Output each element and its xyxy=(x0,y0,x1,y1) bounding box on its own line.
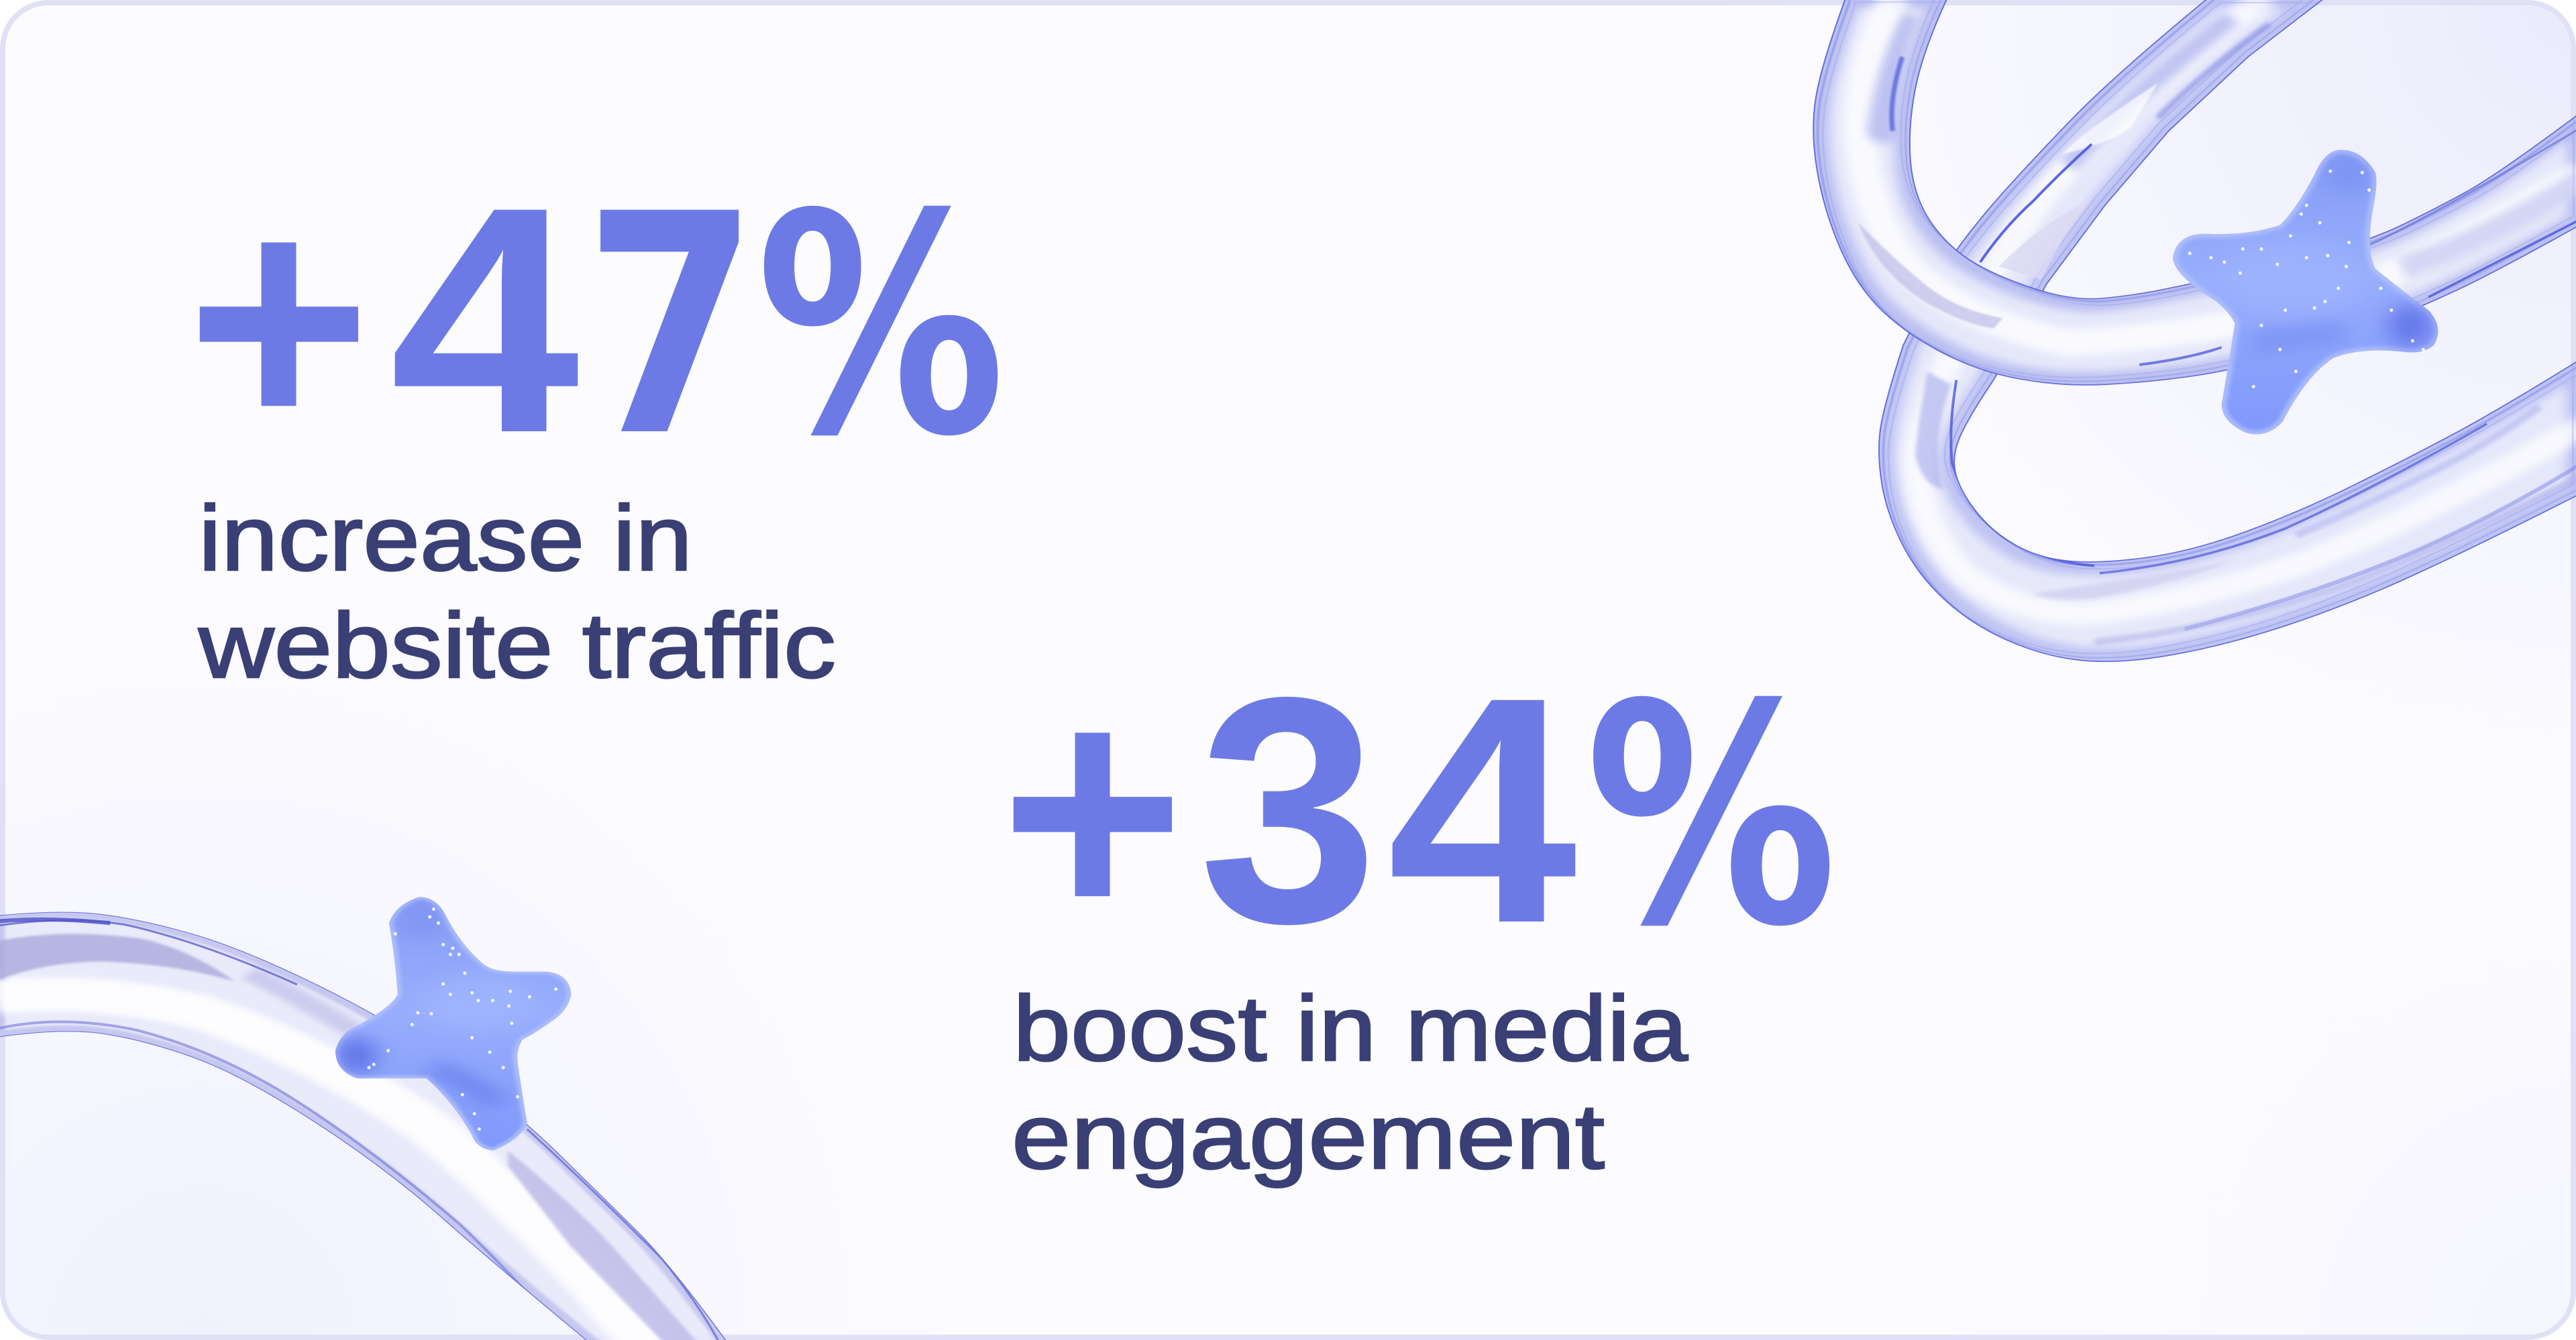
number: +47%: 7 xyxy=(584,150,759,503)
description: increase in website traffic: increase in xyxy=(199,487,692,590)
star speckles xyxy=(2190,171,2423,386)
number: +34%: 4 xyxy=(1387,630,1579,990)
tube: bottom left arc xyxy=(0,912,733,1340)
stat: +47% xyxy=(186,139,1006,697)
description: boost in media engagement: engagement xyxy=(1012,1085,1605,1188)
description: increase in website traffic: website traffic xyxy=(198,594,836,697)
tube: upper loop xyxy=(1805,0,2576,392)
glass tube and star: bottom left xyxy=(0,897,733,1340)
stat: +34% xyxy=(1000,630,1837,1188)
star: bottom left xyxy=(335,897,571,1151)
description: boost in media engagement: boost in media xyxy=(1013,977,1688,1080)
number: +34%: 3 xyxy=(1199,630,1378,990)
star speckles xyxy=(369,909,556,1129)
description: boost in media engagement xyxy=(1012,977,1688,1188)
glass tubes: top right xyxy=(1805,0,2576,669)
number: +34%: + xyxy=(1000,630,1185,990)
number: +34%: % xyxy=(1585,640,1837,993)
number: +47%: 4 xyxy=(390,139,582,500)
star: top right xyxy=(2173,150,2438,435)
description: increase in website traffic xyxy=(198,487,836,697)
number: +47%: % xyxy=(756,150,1006,503)
number: +47%: + xyxy=(186,139,371,500)
tube: lower loop xyxy=(1870,0,2576,669)
